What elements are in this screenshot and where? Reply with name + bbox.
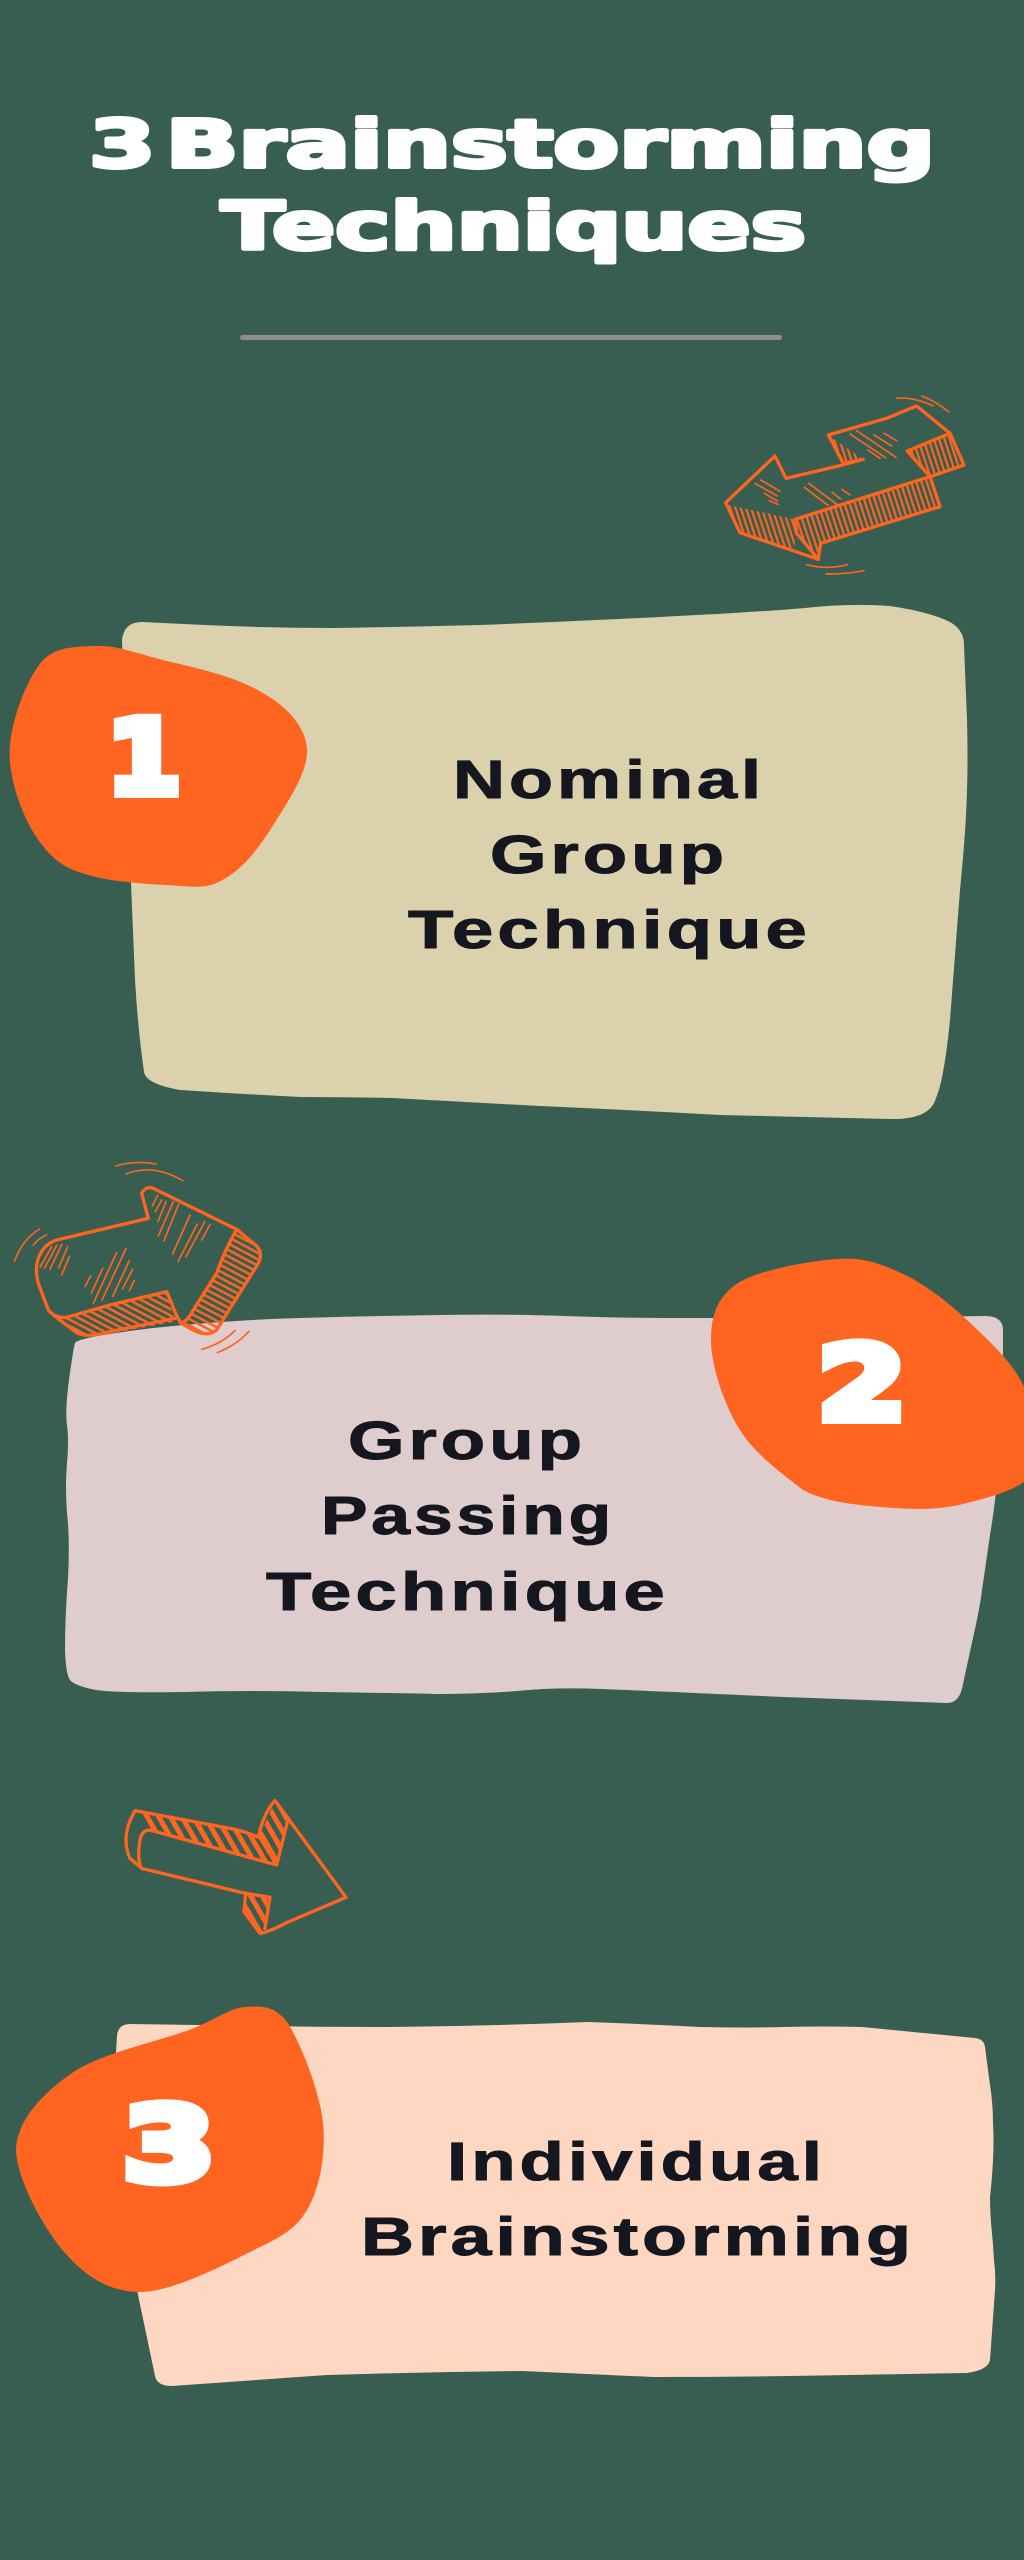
label: Group Passing Technique: Technique bbox=[266, 1562, 669, 1622]
label: Nominal Group Technique: Group bbox=[490, 825, 728, 885]
label: Group Passing Technique bbox=[266, 1411, 669, 1622]
label: Group Passing Technique: Passing bbox=[321, 1486, 615, 1546]
panel background: step 1 bbox=[122, 605, 968, 1119]
icon: arrow pointing left, top right bbox=[726, 396, 964, 574]
icon: arrow pointing right, above step 3 bbox=[126, 1801, 346, 1933]
panel background: step 2 bbox=[65, 1315, 1003, 1703]
label: Individual Brainstorming bbox=[361, 2132, 915, 2267]
label: Individual Brainstorming: Individual bbox=[447, 2132, 826, 2192]
panel: step 1 Nominal Group Technique bbox=[10, 605, 968, 1119]
panel: step 2 Group Passing Technique bbox=[65, 1259, 1024, 1703]
label: Individual Brainstorming: Brainstorming bbox=[361, 2207, 915, 2267]
title: Techniques bbox=[221, 188, 806, 265]
title: 3 Brainstorming bbox=[89, 106, 935, 183]
label: Nominal Group Technique: Technique bbox=[408, 900, 811, 960]
number badge: 2: 2 bbox=[818, 1325, 906, 1444]
number badge: 3 bbox=[16, 2007, 324, 2292]
number badge: 2 bbox=[711, 1259, 1024, 1509]
label: Group Passing Technique: Group bbox=[348, 1411, 586, 1471]
title divider bbox=[240, 335, 782, 340]
number badge: 3: 3 bbox=[123, 2086, 215, 2205]
label: Nominal Group Technique bbox=[408, 750, 811, 960]
label: Nominal Group Technique: Nominal bbox=[453, 750, 765, 810]
number badge: 1: 1 bbox=[107, 699, 181, 818]
panel: step 3 Individual Brainstorming bbox=[16, 2007, 995, 2386]
title bbox=[89, 106, 935, 265]
panel background: step 3 bbox=[116, 2022, 995, 2386]
icon: arrow pointing up-right, left of step 2 bbox=[14, 1162, 261, 1353]
number badge: 1 bbox=[10, 646, 307, 887]
